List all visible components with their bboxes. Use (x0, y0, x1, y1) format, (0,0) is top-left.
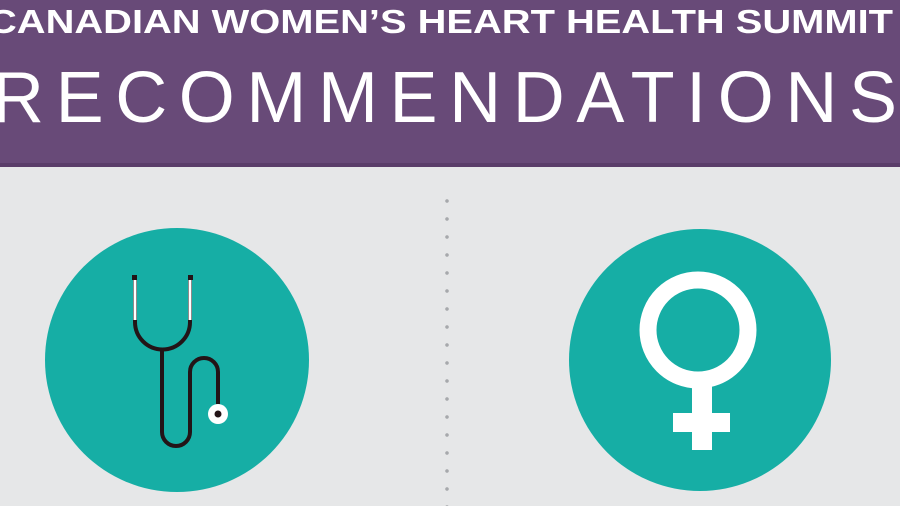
subtitle: RECOMMENDATIONS (0, 58, 897, 138)
title: CANADIAN WOMEN’S HEART HEALTH SUMMIT (0, 3, 893, 40)
divider: dotted line (445, 192, 449, 506)
header banner (0, 0, 900, 167)
icon: stethoscope circle (45, 228, 309, 492)
icon: female symbol circle (569, 229, 831, 491)
